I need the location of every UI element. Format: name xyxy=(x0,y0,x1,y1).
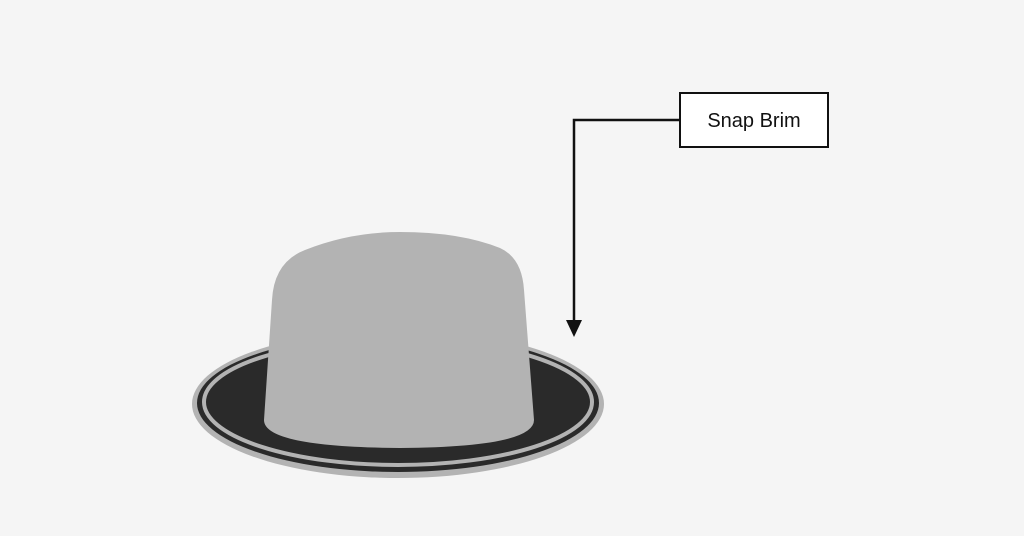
arrow: leader line to brim xyxy=(566,120,680,337)
brim xyxy=(192,330,604,478)
callout: Snap Brim label xyxy=(680,93,828,147)
callout: Snap Brim label: Snap Brim xyxy=(707,110,801,132)
hat xyxy=(192,232,604,478)
crown xyxy=(264,232,534,448)
